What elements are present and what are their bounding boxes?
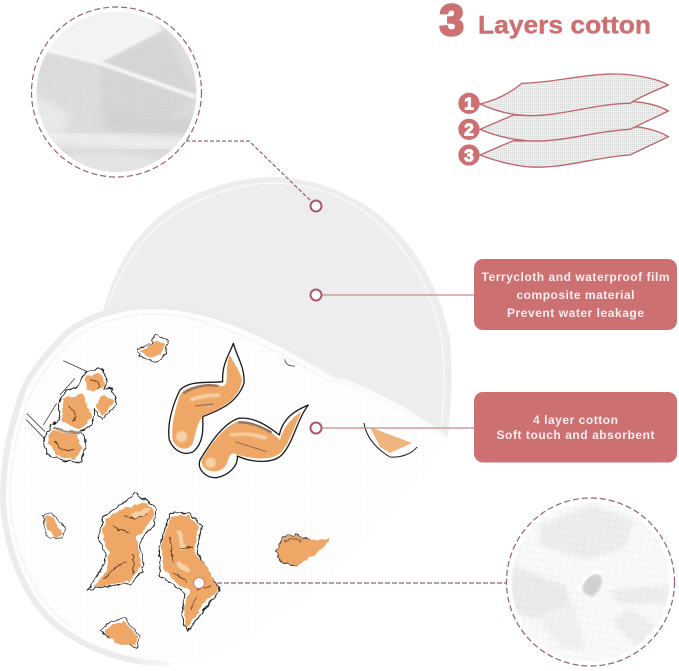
callout: terrycloth and waterproof film — [474, 259, 677, 330]
small nugget left — [43, 513, 65, 538]
chicken wing 2 — [199, 405, 308, 478]
layer 3: 3 — [464, 145, 474, 165]
nugget bottom — [101, 618, 140, 648]
nugget cluster with motion lines — [26, 361, 117, 463]
layer 1: 1 — [464, 94, 474, 114]
small line mark — [285, 359, 295, 366]
heading: 3 Layers cotton — [440, 0, 651, 45]
large chicken strip left — [87, 493, 157, 590]
chicken wing 1 — [169, 343, 244, 453]
partial wing at pad tip — [364, 423, 417, 457]
callout: terrycloth and waterproof film: Prevent water leakage — [507, 306, 644, 320]
back pad: terrycloth side — [103, 177, 451, 441]
heading: 3 Layers cotton: Layers cotton — [478, 12, 651, 40]
large chicken strip right — [159, 513, 220, 631]
terrycloth swatch circle — [30, 5, 202, 180]
nugget right — [276, 534, 330, 566]
layer 2 — [458, 102, 668, 141]
connector: cotton callout — [310, 422, 474, 434]
icon: three cotton layers — [458, 74, 668, 167]
connector: waterproof callout — [310, 290, 474, 300]
front pad: muslin cotton side — [3, 306, 447, 664]
connector: muslin swatch to pad — [194, 578, 506, 588]
chicken print on pad — [26, 335, 330, 648]
callout: 4 layer cotton: 4 layer cotton — [533, 413, 618, 427]
callout: 4 layer cotton: Soft touch and absorbent — [496, 428, 654, 442]
layer 2: 2 — [464, 120, 474, 140]
connector: terrycloth swatch to pad — [186, 141, 322, 212]
small nugget top — [137, 335, 168, 362]
callout: terrycloth and waterproof film: Terrycloth and waterproof film — [482, 270, 670, 284]
layer 1 — [458, 74, 668, 116]
layer 3 — [458, 127, 668, 167]
callout: terrycloth and waterproof film: composite material — [516, 288, 634, 302]
muslin swatch circle — [506, 498, 674, 666]
callout: 4 layer cotton — [474, 392, 677, 462]
